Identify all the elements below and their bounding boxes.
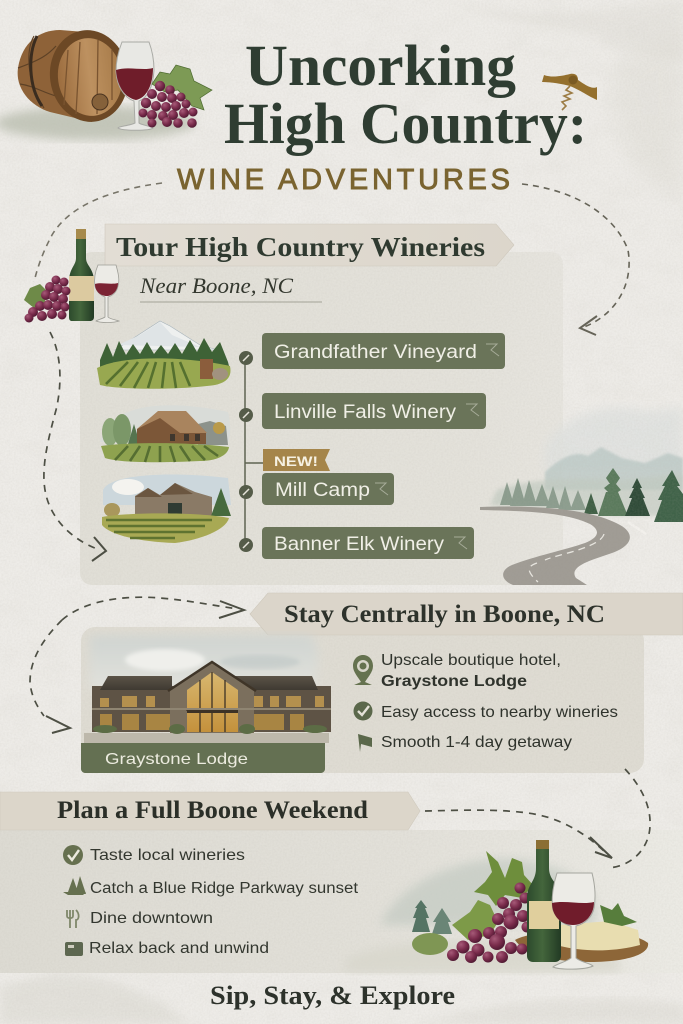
panel: stay background <box>81 627 644 773</box>
ribbon: plan heading: Plan a Full Boone Weekend <box>57 797 368 824</box>
arrow: plan heading to wine board <box>425 810 612 858</box>
panel: plan weekend background <box>0 830 683 973</box>
text: easy access: Easy access to nearby wineries <box>381 704 618 721</box>
list: hotel features <box>353 652 618 752</box>
icon: location pin <box>353 655 373 685</box>
timeline dot: banner elk <box>239 538 253 552</box>
text: upscale boutique hotel <box>381 652 561 690</box>
timeline dot: grandfather <box>239 351 253 365</box>
illustration: mill camp <box>102 474 231 543</box>
illustration: linville falls winery <box>100 405 230 462</box>
text: upscale boutique hotel: Upscale boutique hotel, <box>381 652 561 669</box>
arrow: title to first section, left <box>34 183 162 282</box>
pill: mill camp <box>262 473 394 505</box>
pill: banner elk winery: Banner Elk Winery <box>274 534 445 555</box>
text: dine downtown: Dine downtown <box>90 910 213 927</box>
pill: linville falls winery <box>262 393 486 429</box>
arrow: to stay section <box>62 597 244 620</box>
ribbon: tour heading: Tour High Country Wineries <box>116 232 485 262</box>
icon: corkscrew <box>542 74 597 110</box>
illustration: grandfather vineyard <box>97 321 230 389</box>
arrow: title to first section, right <box>522 184 629 335</box>
text: relax: Relax back and unwind <box>89 940 269 957</box>
label: graystone lodge <box>81 743 325 773</box>
timeline: winery stops <box>239 351 264 552</box>
label: graystone lodge: Graystone Lodge <box>105 751 248 768</box>
pill: mill camp: Mill Camp <box>275 480 370 501</box>
subtitle: near boone: Near Boone, NC <box>139 273 293 298</box>
icon: fork and knife <box>67 910 79 928</box>
tag: new: NEW! <box>274 453 318 469</box>
icon: check badge <box>354 702 372 720</box>
icon: wine barrel with glass and grapes <box>0 25 212 140</box>
pill: grandfather vineyard <box>262 333 505 369</box>
ribbon: plan heading <box>0 792 420 830</box>
title: High Country: <box>224 91 587 156</box>
tag: new <box>263 449 330 471</box>
icon: trees <box>63 876 86 895</box>
timeline dot: mill camp <box>239 485 253 499</box>
panel: tour wineries background <box>80 252 563 585</box>
title <box>224 33 587 156</box>
text: upscale boutique hotel: Graystone Lodge <box>381 673 527 690</box>
icon: flag <box>358 734 372 752</box>
text: smooth getaway: Smooth 1-4 day getaway <box>381 734 572 751</box>
icon: check <box>63 845 83 865</box>
text: parkway sunset: Catch a Blue Ridge Parkway sunset <box>90 880 359 897</box>
scenery: mountains, pines and winding road <box>480 408 683 585</box>
footer tagline: Sip, Stay, & Explore <box>210 981 455 1010</box>
icon: bottle, glass and grapes <box>24 229 119 322</box>
arrow: looping to lodge <box>30 620 70 733</box>
timeline dot: linville <box>239 408 253 422</box>
ribbon: stay heading <box>250 593 683 635</box>
title: Uncorking <box>245 33 516 98</box>
illustration: graystone lodge <box>84 636 331 743</box>
pill: banner elk winery <box>262 527 474 559</box>
list: weekend plans <box>63 845 359 957</box>
illustration: wine, grapes and cheese board <box>345 840 648 972</box>
ribbon: tour heading <box>105 224 514 266</box>
icon: bed <box>65 942 83 956</box>
arrow: bottle to winery list <box>44 332 106 561</box>
pill: linville falls winery: Linville Falls Winery <box>274 402 457 423</box>
subtitle: wine adventures: WINE ADVENTURES <box>177 164 510 196</box>
arrow: lodge to cheese board <box>608 769 650 868</box>
pill: grandfather vineyard: Grandfather Vineyard <box>274 342 477 363</box>
text: taste local wineries: Taste local wineries <box>90 847 245 864</box>
ribbon: stay heading: Stay Centrally in Boone, NC <box>284 601 605 628</box>
